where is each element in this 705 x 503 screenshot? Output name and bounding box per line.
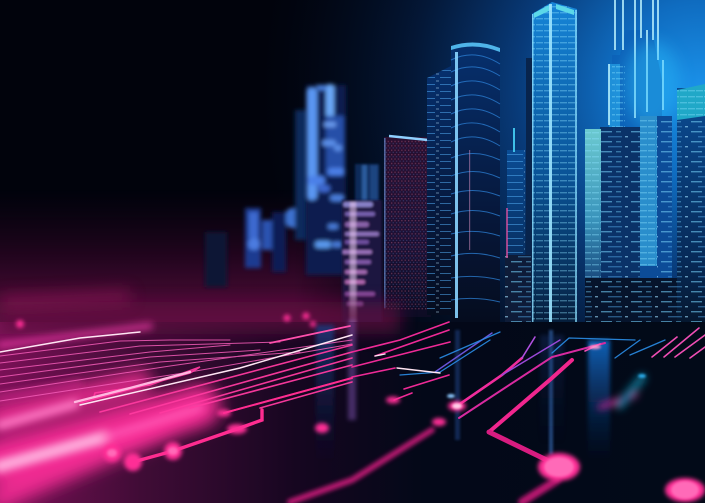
pink horizon haze xyxy=(0,213,405,322)
node glows xyxy=(16,312,705,502)
building: lower window band xyxy=(585,278,680,336)
building: tall central tower xyxy=(532,2,577,342)
distant blurred buildings xyxy=(205,110,308,287)
circuit traces: blue lines xyxy=(400,332,665,375)
building: cyan block xyxy=(640,116,672,300)
circuit traces: white segments xyxy=(375,354,440,373)
node cores xyxy=(107,345,699,499)
circuit traces: lower pink path xyxy=(133,378,352,462)
circuit trace: corner to large node xyxy=(489,360,572,502)
ground plane xyxy=(0,322,705,503)
circuit traces: right pink stripes xyxy=(585,328,705,358)
building: pale pink tower xyxy=(342,200,382,325)
building: rear slim blue towers xyxy=(505,58,532,338)
ground fade on horizon xyxy=(0,302,400,334)
building: far right tower xyxy=(677,84,705,333)
building: blurred tower left xyxy=(306,84,346,275)
circuit traces: centre pink xyxy=(352,322,450,400)
blurred right glow trace xyxy=(600,378,642,407)
building: round tower xyxy=(451,42,500,322)
skyline xyxy=(306,0,705,342)
blue sky glow xyxy=(240,0,705,340)
building: dark tower beside round tower xyxy=(427,66,451,315)
circuit trace: large bottom-left branch xyxy=(290,430,432,502)
glowing circuit nodes xyxy=(16,312,705,502)
circuit trace: pink riser xyxy=(435,333,605,418)
building: bright spire tower xyxy=(609,0,663,300)
building: purple tower xyxy=(384,136,431,317)
building reflections xyxy=(316,320,610,465)
building: green-lit block xyxy=(585,127,640,332)
circuit lines: left pink light streaks xyxy=(0,322,705,502)
far pink streak xyxy=(0,296,130,302)
building: small rear block xyxy=(355,164,379,214)
glow: spire bloom xyxy=(624,41,680,129)
